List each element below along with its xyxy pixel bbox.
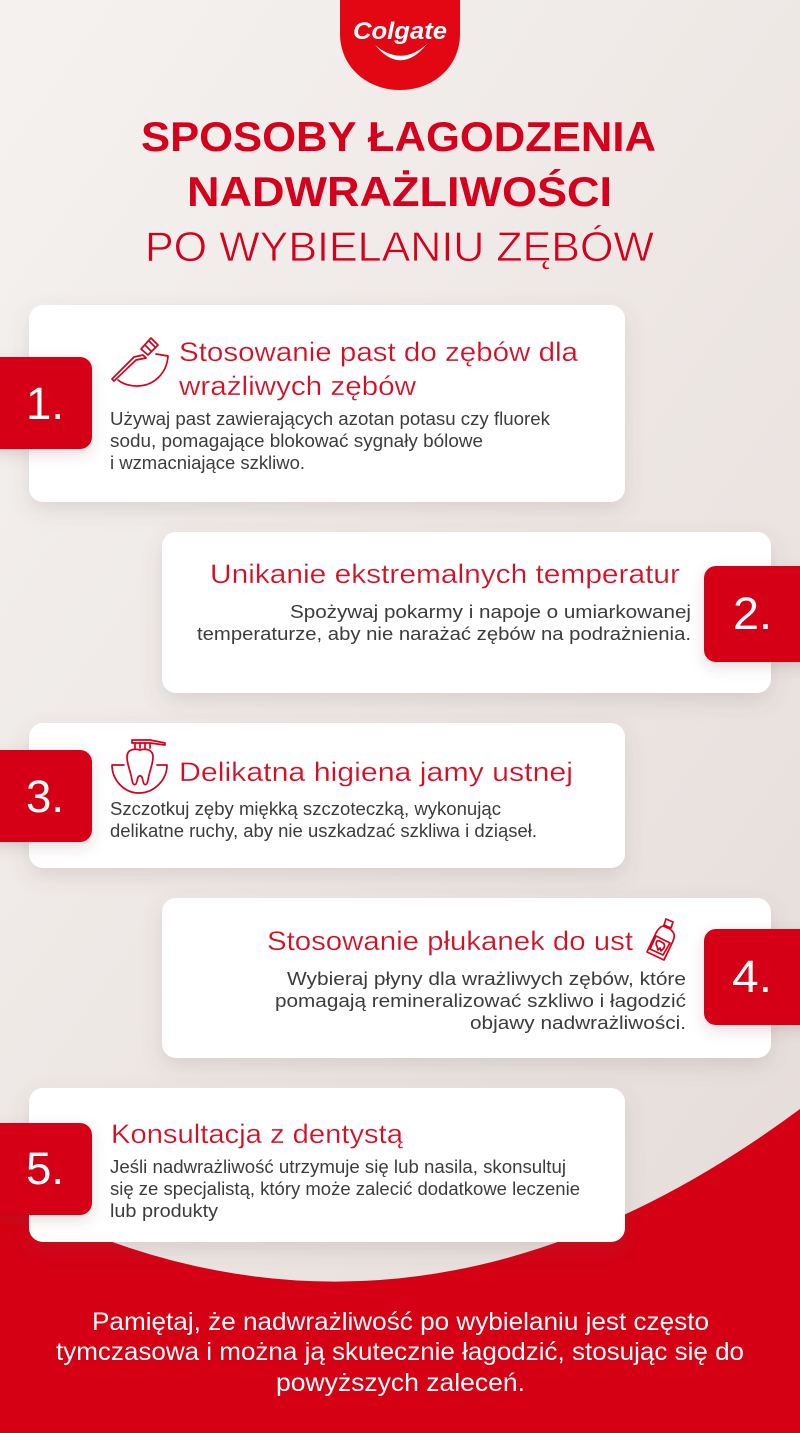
heading 2: Unikanie ekstremalnych temperatur xyxy=(210,559,680,589)
body 4: pomagają remineralizować szkliwo i łagodzić xyxy=(275,990,686,1011)
body 1: Używaj past zawierających azotan potasu czy fluorek xyxy=(110,408,551,429)
logo: Colgate xyxy=(340,0,460,90)
number badge 4 xyxy=(704,929,800,1025)
panel 4: mouthwash xyxy=(162,898,800,1058)
number badge 1 xyxy=(0,357,92,449)
closing note: powyższych zaleceń. xyxy=(276,1369,525,1397)
closing note: Pamiętaj, że nadwrażliwość po wybielaniu jest często xyxy=(92,1308,709,1336)
number badge 2: 2. xyxy=(733,588,772,639)
body 1: sodu, pomagające blokować sygnały bólowe xyxy=(110,430,483,451)
body 4 xyxy=(275,968,686,1033)
closing note: tymczasowa i można ją skutecznie łagodzić, stosując się do xyxy=(56,1338,744,1366)
number badge 3: 3. xyxy=(26,771,64,822)
number badge 4: 4. xyxy=(732,951,772,1002)
body 4: Wybieraj płyny dla wrażliwych zębów, które xyxy=(287,968,686,989)
body 2: temperaturze, aby nie narażać zębów na podrażnienia. xyxy=(197,623,691,644)
body 3: Szczotkuj zęby miękką szczoteczką, wykonując xyxy=(110,798,501,819)
body 5 xyxy=(110,1156,580,1221)
panel 2: temperatures xyxy=(162,532,800,693)
body 3: delikatne ruchy, aby nie uszkadzać szkliwa i dziąseł. xyxy=(110,820,537,841)
heading 1: Stosowanie past do zębów dla xyxy=(179,337,579,367)
heading 4: Stosowanie płukanek do ust xyxy=(267,926,634,956)
heading 1 xyxy=(178,337,579,401)
panel 5: dentist xyxy=(0,1088,625,1242)
icon: tooth with brush xyxy=(112,740,167,793)
title: NADWRAŻLIWOŚCI xyxy=(187,167,612,215)
body 3 xyxy=(110,798,537,841)
number badge 5 xyxy=(0,1123,92,1215)
body 5: Jeśli nadwrażliwość utrzymuje się lub nasila, skonsultuj xyxy=(110,1156,566,1177)
icon: mouthwash bottle xyxy=(647,919,674,960)
body 5: się ze specjalistą, który może zalecić dodatkowe leczenie xyxy=(110,1178,580,1199)
number badge 2 xyxy=(704,566,800,662)
heading 1: wrażliwych zębów xyxy=(178,371,417,401)
body 1: i wzmacniające szkliwo. xyxy=(110,452,305,473)
number badge 1: 1. xyxy=(26,378,64,429)
body 4: objawy nadwrażliwości. xyxy=(470,1012,686,1033)
panel 1: toothpaste xyxy=(0,305,625,502)
title: SPOSOBY ŁAGODZENIA xyxy=(141,113,656,160)
icon: toothbrush over gum xyxy=(112,338,168,386)
panel 3: gentle hygiene xyxy=(0,723,625,868)
body 5: lub produkty xyxy=(110,1200,219,1221)
heading 5: Konsultacja z dentystą xyxy=(111,1119,404,1149)
logo: Colgate: Colgate xyxy=(353,18,447,45)
number badge 5: 5. xyxy=(26,1143,64,1194)
red bottom wave xyxy=(0,1109,800,1433)
number badge 3 xyxy=(0,750,92,842)
closing note xyxy=(56,1308,744,1397)
body 2: Spożywaj pokarmy i napoje o umiarkowanej xyxy=(290,601,691,622)
title xyxy=(141,113,656,270)
body 2 xyxy=(197,601,691,644)
title: PO WYBIELANIU ZĘBÓW xyxy=(145,223,654,270)
heading 3: Delikatna higiena jamy ustnej xyxy=(179,757,573,787)
body 1 xyxy=(110,408,551,473)
